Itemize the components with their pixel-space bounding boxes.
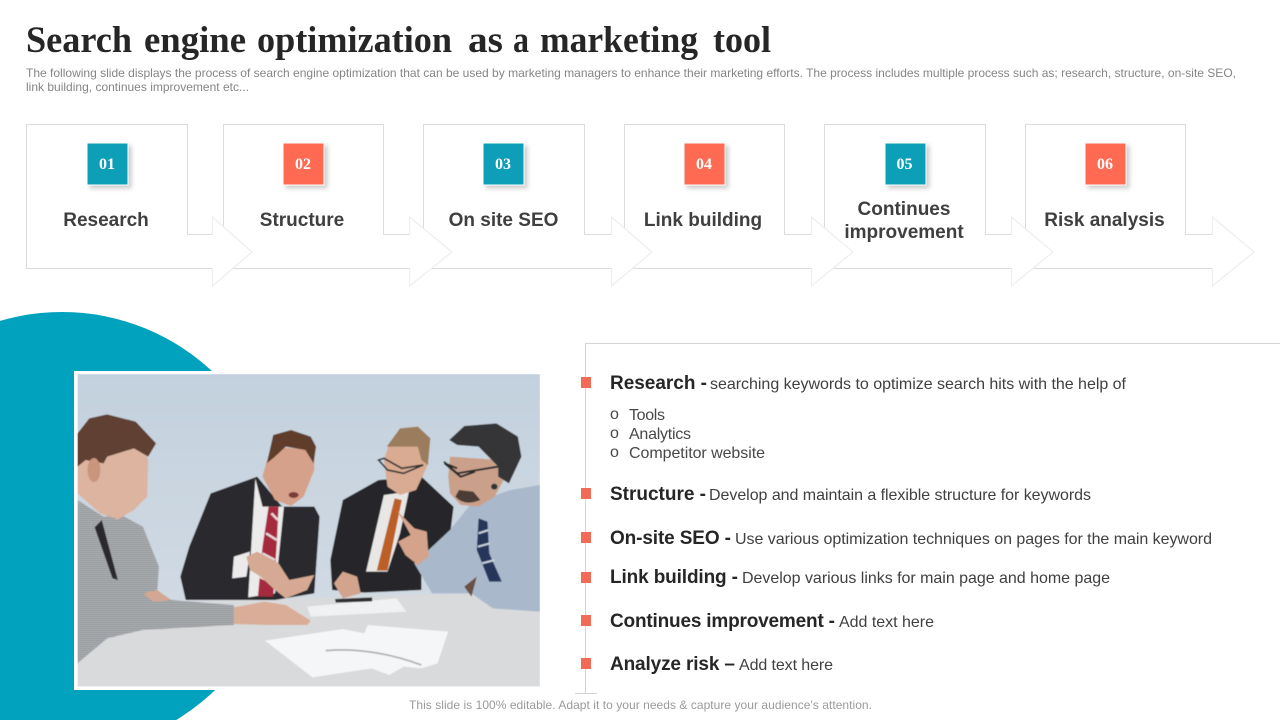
- description text: link building, continues improvement etc...: [26, 80, 249, 94]
- footer note: This slide is 100% editable. Adapt it to your needs & capture your audience's attention.: [409, 698, 872, 712]
- step 1: research: Research: [63, 210, 149, 231]
- item: continues improvement: Add text here: [839, 614, 934, 631]
- step 3: on site SEO: 03: [495, 156, 511, 173]
- item: structure: [581, 484, 1091, 505]
- step 1: research: [26, 124, 252, 286]
- step 1: research: 01: [99, 156, 115, 173]
- item: analyze risk: [581, 654, 833, 675]
- step 3: on site SEO: [424, 124, 652, 286]
- item: structure: Structure -: [610, 484, 706, 505]
- title: as: [468, 20, 503, 61]
- sub-list: research tools: Analytics: [629, 426, 691, 443]
- sub-list: research tools: o: [610, 425, 619, 442]
- step 5: continues improvement: [824, 124, 1053, 286]
- item: continues improvement: Continues improvement -: [610, 611, 835, 632]
- process flow: six steps: [26, 124, 1254, 286]
- item: on-site SEO: Use various optimization techniques on pages for the main keyword: [735, 531, 1212, 548]
- item: link building: [581, 567, 1110, 588]
- title: optimization: [257, 20, 452, 61]
- item: structure: Develop and maintain a flexible structure for keywords: [709, 487, 1091, 504]
- item: research: [581, 373, 1127, 394]
- title: tool: [713, 20, 771, 61]
- sub-list: research tools: [610, 406, 765, 462]
- step 3: on site SEO: On site SEO: [449, 210, 558, 231]
- step 4: link building: 04: [696, 156, 712, 173]
- sub-list: research tools: o: [610, 444, 619, 461]
- item: analyze risk: Analyze risk –: [610, 654, 735, 675]
- item: on-site SEO: On-site SEO -: [610, 528, 731, 549]
- step 4: link building: [624, 124, 853, 286]
- title: Search: [26, 20, 132, 61]
- teal circle background: [0, 312, 282, 720]
- item: link building: Link building -: [610, 567, 738, 588]
- sub-list: research tools: o: [610, 406, 619, 423]
- step 6: risk analysis: [1026, 124, 1254, 286]
- item: link building: Develop various links for main page and home page: [742, 570, 1110, 587]
- list: process details: [581, 373, 1212, 675]
- step 6: risk analysis: 06: [1097, 156, 1113, 173]
- sub-list: research tools: Tools: [629, 407, 665, 424]
- item: analyze risk: Add text here: [739, 657, 833, 674]
- list frame and timeline: [575, 344, 1280, 694]
- sub-list: research tools: Competitor website: [629, 445, 765, 462]
- item: research: Research -: [610, 373, 707, 394]
- description text: [26, 66, 1236, 94]
- item: continues improvement: [581, 611, 934, 632]
- title: engine: [144, 20, 246, 61]
- item: research: searching keywords to optimize search hits with the help of: [710, 376, 1127, 393]
- step 6: risk analysis: Risk analysis: [1044, 210, 1165, 231]
- step 5: continues improvement: improvement: [844, 222, 964, 243]
- photo: four businessmen in a meeting: [74, 371, 564, 690]
- step 2: structure: 02: [295, 156, 311, 173]
- description text: The following slide displays the process of search engine optimization that can be used by marketing managers to enhance their marketing efforts. The process includes multiple process such as; research, structure, on-site SEO,: [26, 66, 1236, 80]
- step 5: continues improvement: Continues: [858, 199, 950, 220]
- step 4: link building: Link building: [644, 210, 762, 231]
- item: on-site SEO: [581, 528, 1212, 549]
- step 2: structure: Structure: [260, 210, 344, 231]
- title: marketing: [540, 20, 698, 61]
- title: a: [513, 20, 529, 61]
- title: [26, 20, 771, 61]
- step 5: continues improvement: 05: [896, 156, 912, 173]
- step 2: structure: [224, 124, 452, 286]
